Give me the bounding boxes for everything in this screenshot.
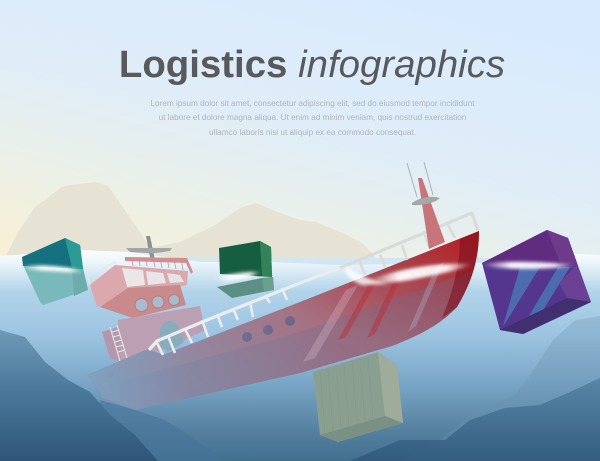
body text: ullamco laboris nisi ut aliquip ex ea commodo consequat. — [209, 128, 416, 137]
bow shading — [442, 231, 479, 318]
main cabin — [102, 306, 205, 362]
hull portholes — [106, 316, 295, 378]
arched door — [160, 321, 184, 352]
bridge upper — [90, 265, 188, 307]
title: Logistics infographics — [119, 43, 505, 86]
body text: Lorem ipsum dolor sit amet, consectetur adipiscing elit, sed do eiusmod tempor incididunt — [150, 98, 475, 108]
deck railing underwater — [149, 266, 345, 355]
ladder — [110, 325, 127, 361]
side railing — [87, 262, 117, 285]
hull — [87, 231, 479, 410]
deck railing above water — [340, 213, 478, 275]
light rays on hull — [303, 262, 444, 362]
ship — [87, 162, 479, 410]
distant mountains — [7, 182, 382, 264]
foam streaks — [22, 262, 578, 285]
underwater mountains — [0, 316, 600, 461]
sea — [0, 250, 600, 461]
body text: ut labore et dolore magna aliqua. Ut enim ad minim veniam, quis nostrud exercitation — [159, 113, 466, 122]
container: olive sunken — [313, 352, 403, 442]
hull faded stern overlay — [87, 286, 340, 410]
sky background — [0, 0, 600, 275]
white wave crest — [0, 250, 600, 292]
bridge upper railing — [125, 257, 193, 274]
container: green — [217, 241, 274, 298]
container: purple — [482, 230, 591, 334]
porthole windows — [135, 294, 180, 312]
container: teal — [22, 238, 88, 305]
rear funnel mast — [407, 162, 445, 249]
body text — [150, 98, 475, 137]
mast: rear with cross beam — [126, 236, 172, 262]
bridge lower with portholes — [100, 285, 186, 318]
